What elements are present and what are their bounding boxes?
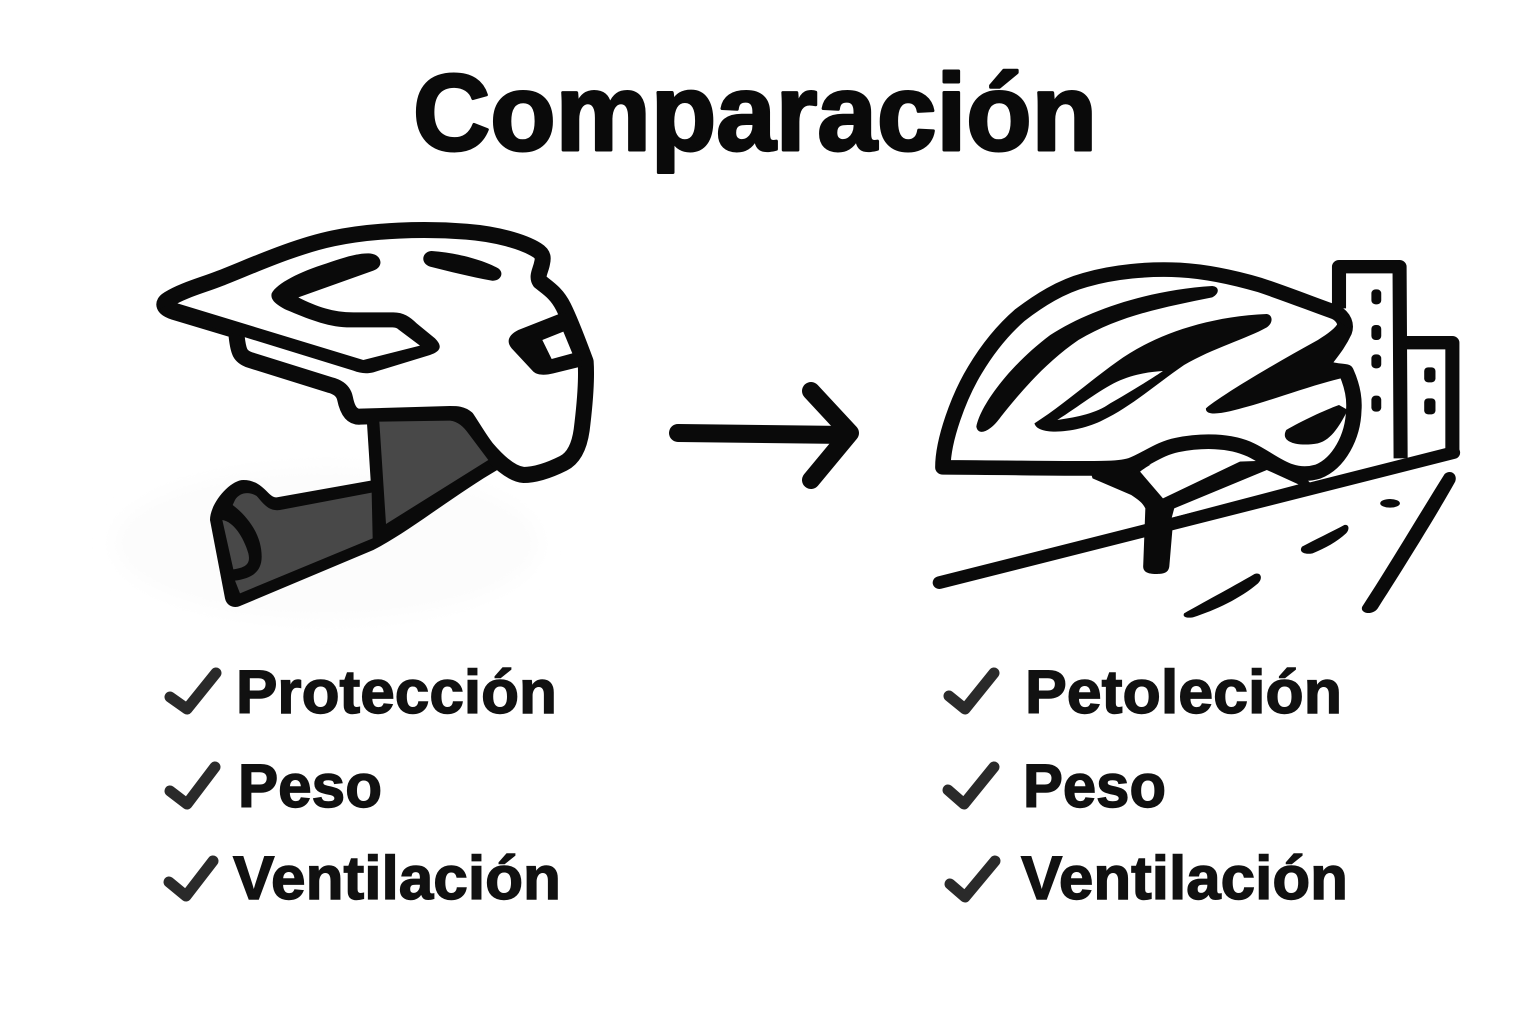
list: right helmet features — [948, 658, 1348, 912]
icon: full-face mountain bike helmet — [113, 230, 586, 620]
icon: road cycling helmet with city — [939, 267, 1456, 618]
arrow — [678, 391, 850, 480]
soft shadow — [113, 467, 540, 620]
item: Ventilación: Ventilación — [1021, 844, 1348, 912]
list: left helmet features — [169, 658, 561, 912]
top vent — [423, 251, 501, 281]
item: Protección: Protección — [236, 658, 557, 726]
item: Peso: Peso — [238, 752, 382, 820]
helmet shell — [943, 270, 1354, 474]
item: Peso — [948, 752, 1166, 820]
chin guard panels — [379, 421, 488, 524]
title: Comparación — [413, 52, 1097, 174]
side vent — [509, 312, 583, 375]
road line — [939, 453, 1453, 583]
building windows — [1371, 289, 1435, 414]
item: Ventilación: Ventilación — [233, 844, 561, 912]
helmet shell — [164, 230, 586, 475]
item: Peso: Peso — [1023, 752, 1166, 820]
strap and pad — [1089, 460, 1311, 574]
visor edge and front vent — [160, 253, 440, 373]
item: Peso — [170, 752, 382, 820]
helmet vents — [976, 286, 1218, 432]
chin guard outline — [210, 413, 498, 607]
item: Petoleción: Petoleción — [1025, 658, 1342, 726]
buildings — [1339, 267, 1452, 458]
road markings — [1184, 472, 1456, 618]
